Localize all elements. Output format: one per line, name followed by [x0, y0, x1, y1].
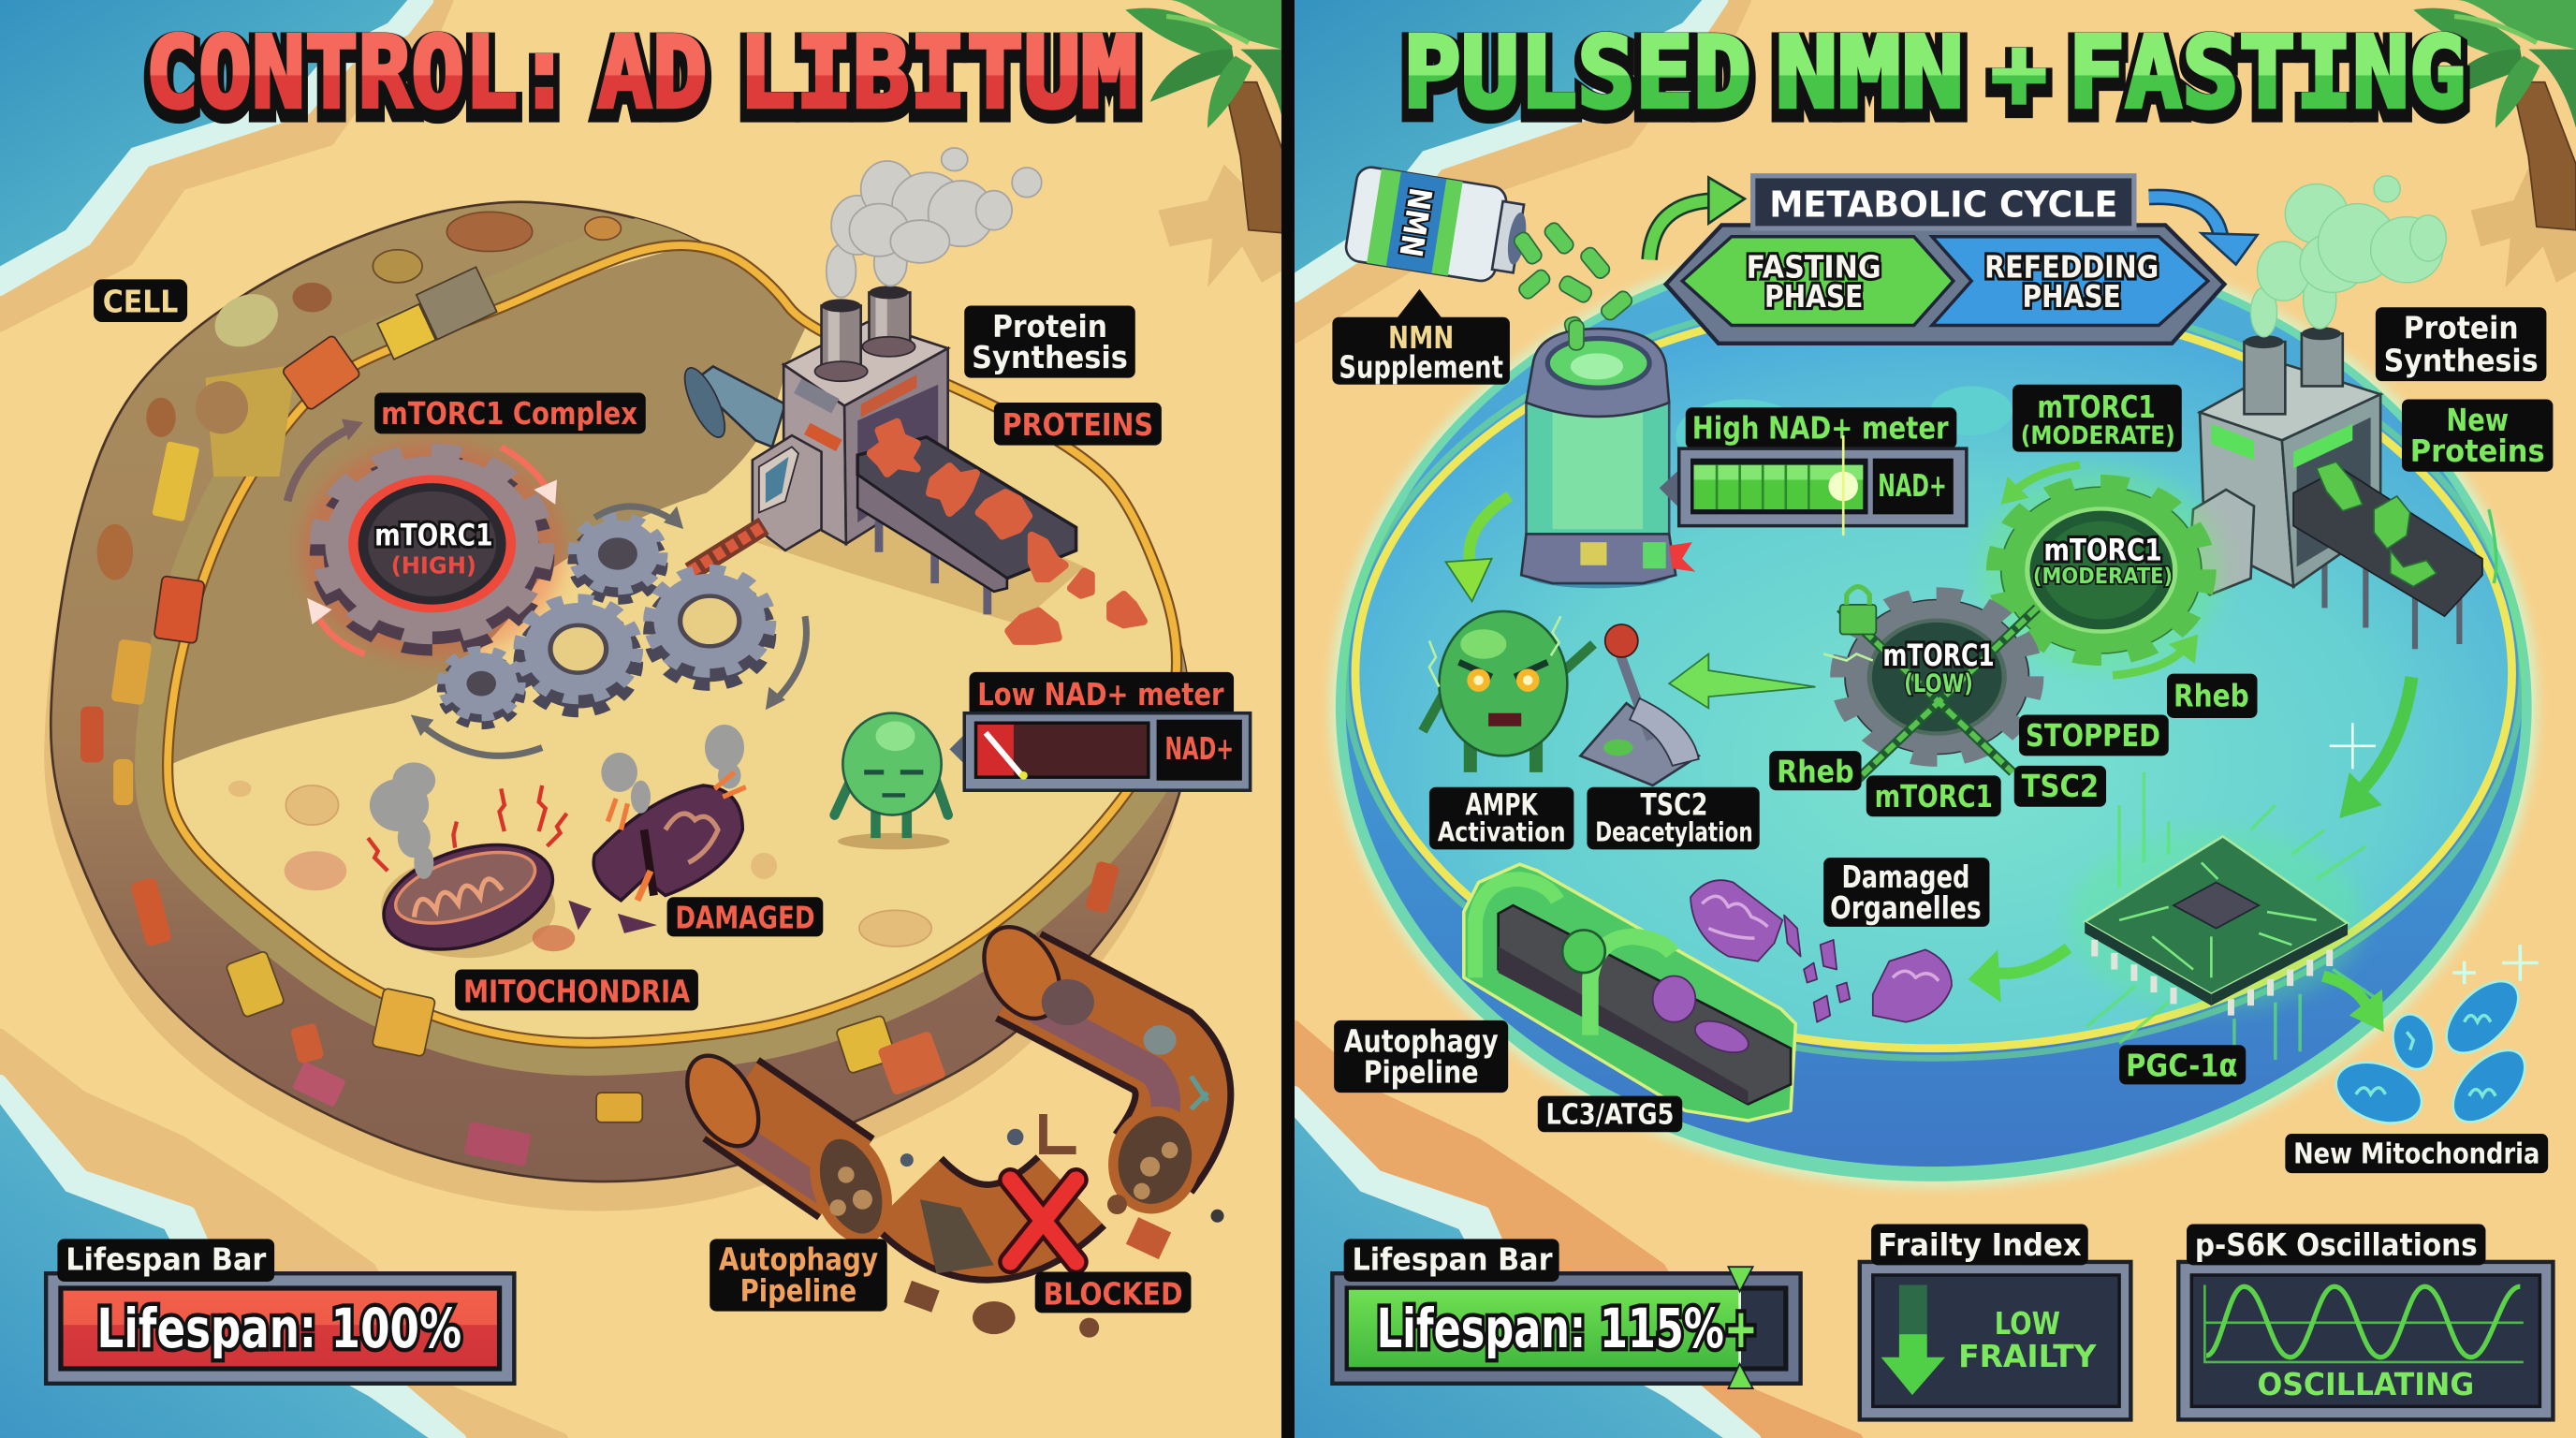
NMN supplement label: NMN: [1388, 319, 1454, 356]
TSC2 deacetylation label: [1587, 787, 1760, 849]
beach background: [0, 0, 1281, 1438]
gear: mTORC1 low chained: mTORC1: [1882, 639, 1995, 673]
gear: mTORC1 high: [287, 419, 564, 659]
damaged organelles label: Organelles: [1830, 889, 1982, 926]
AMPK activation label: AMPK: [1466, 789, 1539, 823]
title: AD: [597, 22, 708, 137]
mitochondria label: MITOCHONDRIA: [463, 974, 690, 1010]
p-S6K oscillations panel: p-S6K Oscillations: [2195, 1226, 2478, 1263]
autophagy pipe blocked: [673, 914, 1224, 1338]
tired cell character: [835, 713, 949, 849]
panel: pulsed NMN + fasting: [1295, 0, 2576, 1438]
title: +: [1991, 22, 2047, 137]
mTORC1 moderate label: (MODERATE): [2021, 422, 2175, 450]
metabolic cycle hexagon: FASTING: [1747, 249, 1881, 286]
NMN bottle: [1344, 165, 1532, 286]
frailty index panel: [1860, 1225, 2130, 1419]
conveyor with proteins: [690, 422, 1144, 640]
protein synthesis label: [964, 305, 1135, 378]
frailty index panel: Frailty Index: [1878, 1226, 2082, 1263]
autophagy pipeline label: [1334, 1020, 1508, 1093]
protein synthesis label: Synthesis: [972, 339, 1128, 375]
rheb label left: Rheb: [1777, 753, 1854, 789]
gears: machinery: [411, 506, 806, 756]
autophagy pipeline label: [710, 1239, 887, 1312]
p-S6K oscillations panel: OSCILLATING: [2258, 1366, 2474, 1402]
mitochondria damaged: [368, 725, 746, 968]
mTORC1 label: mTORC1: [1875, 778, 1993, 814]
low NAD+ meter label: Low NAD+ meter: [977, 676, 1224, 712]
gear: mTORC1 low chained: [1840, 587, 2037, 781]
frailty index panel: LOW: [1995, 1305, 2060, 1342]
gear: mTORC1 moderate: (MODERATE): [2033, 565, 2173, 589]
lifespan bar: 115%: Lifespan Bar: [1352, 1241, 1553, 1278]
stopped label: STOPPED: [2026, 717, 2160, 754]
smoke: [2250, 176, 2446, 337]
damaged organelles label: [1823, 858, 1989, 927]
high NAD+ meter label: High NAD+ meter: [1692, 410, 1949, 447]
damaged organelles: [1690, 880, 1952, 1022]
beach background: [1295, 0, 2576, 1438]
NMN supplement label: [1332, 289, 1510, 386]
metabolic cycle hexagon: PHASE: [1764, 278, 1863, 315]
lifespan bar: 115%: [1332, 1239, 1801, 1388]
lifespan bar: 100%: Lifespan Bar: [66, 1241, 267, 1278]
lifespan bar: 100%: [46, 1239, 514, 1384]
autophagy pipeline conveyor: [1464, 864, 1795, 1121]
protein synthesis label: [2376, 307, 2546, 381]
autophagy pipeline label: Pipeline: [740, 1272, 856, 1309]
mTORC1 moderate label: mTORC1: [2037, 389, 2156, 425]
title: CONTROL:: [145, 15, 571, 130]
metabolic cycle hexagon: [1666, 176, 2224, 344]
arrow: reactor to AMPK: [1445, 496, 1510, 601]
frailty index panel: FRAILTY: [1958, 1338, 2097, 1374]
NMN pills: [1512, 220, 1634, 352]
AMPK activation label: Activation: [1438, 817, 1566, 848]
title: [144, 31, 1142, 124]
title: FASTING: [2069, 22, 2466, 137]
metabolic cycle hexagon: METABOLIC CYCLE: [1769, 184, 2117, 227]
TSC2 deacetylation label: Deacetylation: [1595, 817, 1753, 848]
proteins label: PROTEINS: [1003, 406, 1153, 443]
factory: protein synthesis: [677, 286, 1084, 624]
lifespan bar: 115%: Lifespan: 115%+: [1377, 1297, 1758, 1360]
arrow: factory to chip: [2339, 677, 2411, 818]
factory: protein synthesis: [2188, 327, 2496, 649]
PGC-1a label: PGC-1α: [2126, 1048, 2237, 1084]
metabolic cycle hexagon: PHASE: [2023, 278, 2121, 315]
new proteins label: [2402, 399, 2553, 472]
TSC2 lever: [1580, 624, 1699, 785]
NMN supplement label: Supplement: [1339, 349, 1503, 386]
AMPK character: [1423, 611, 1593, 772]
title: FASTING: [2069, 15, 2466, 130]
low NAD+ meter: [949, 713, 1251, 790]
gear: mTORC1 low chained: (LOW): [1904, 670, 1973, 698]
title: LIBITUM: [739, 15, 1137, 130]
palm tree: [1125, 0, 1288, 287]
gear: mTORC1 moderate: [1980, 465, 2223, 675]
palm tree: [2413, 0, 2576, 287]
new proteins label: Proteins: [2410, 433, 2545, 469]
title: NMN: [1775, 22, 1964, 137]
blocked label: BLOCKED: [1043, 1276, 1183, 1313]
sparkles: [1429, 616, 2376, 769]
LC3/ATG5 label: LC3/ATG5: [1546, 1098, 1674, 1131]
gear: mTORC1 moderate: mTORC1: [2043, 534, 2162, 567]
NMN bottle: NMN: [1392, 185, 1439, 259]
title: AD: [597, 15, 708, 130]
autophagy pipeline label: Autophagy: [719, 1241, 878, 1278]
PGC-1a chip: [2069, 772, 2382, 1068]
metabolic cycle hexagon: REFEDDING: [1984, 249, 2159, 286]
protein synthesis label: Synthesis: [2384, 343, 2539, 379]
high NAD+ meter: NAD+: [1878, 467, 1947, 504]
p-S6K oscillations panel: [2178, 1225, 2553, 1419]
rheb label right: Rheb: [2174, 678, 2249, 714]
new proteins label: New: [2446, 402, 2509, 438]
damaged organelles label: Damaged: [1841, 858, 1969, 895]
high NAD+ meter: [1660, 435, 1967, 536]
reactor: [1521, 320, 1695, 588]
low NAD+ meter: NAD+: [1164, 730, 1234, 767]
arrow: chip to organelles: [1969, 948, 2069, 1003]
cell: [44, 202, 1191, 1211]
title: +: [1991, 15, 2047, 130]
autophagy pipeline label: Pipeline: [1364, 1054, 1479, 1091]
AMPK activation label: [1429, 787, 1573, 849]
damaged label: DAMAGED: [675, 900, 815, 936]
title: NMN: [1775, 15, 1964, 130]
autophagy pipeline label: Autophagy: [1344, 1022, 1499, 1059]
TSC2 deacetylation label: TSC2: [1640, 789, 1707, 823]
title: [1403, 15, 2466, 137]
title: LIBITUM: [739, 22, 1137, 137]
title: CONTROL:: [145, 22, 571, 137]
arrows: metabolic cycle: [1649, 178, 2258, 265]
divider: [1281, 0, 1295, 1438]
cell: [1329, 225, 2539, 1188]
gear: mTORC1 high: (HIGH): [391, 552, 476, 580]
new mitochondria label: New Mitochondria: [2293, 1138, 2539, 1171]
protein synthesis label: Protein: [2404, 310, 2519, 346]
title: PULSED: [1403, 22, 1751, 137]
new mitochondria: [2328, 945, 2539, 1135]
arrow: low mTORC1 to lever: [1669, 654, 1815, 708]
mTORC1 complex label: mTORC1 Complex: [381, 395, 637, 432]
panel: control ad libitum: [0, 0, 1288, 1438]
lifespan bar: 100%: Lifespan: 100%: [97, 1297, 461, 1360]
title: PULSED: [1403, 15, 1751, 130]
arrow: chip to new mitochondria: [2323, 976, 2384, 1032]
tsc2 label: TSC2: [2022, 768, 2099, 804]
gear: mTORC1 high: mTORC1: [374, 520, 493, 553]
cell label: CELL: [103, 283, 178, 319]
mTORC1 moderate label: [2012, 385, 2182, 452]
smoke: [827, 148, 1042, 298]
protein synthesis label: Protein: [992, 308, 1107, 345]
